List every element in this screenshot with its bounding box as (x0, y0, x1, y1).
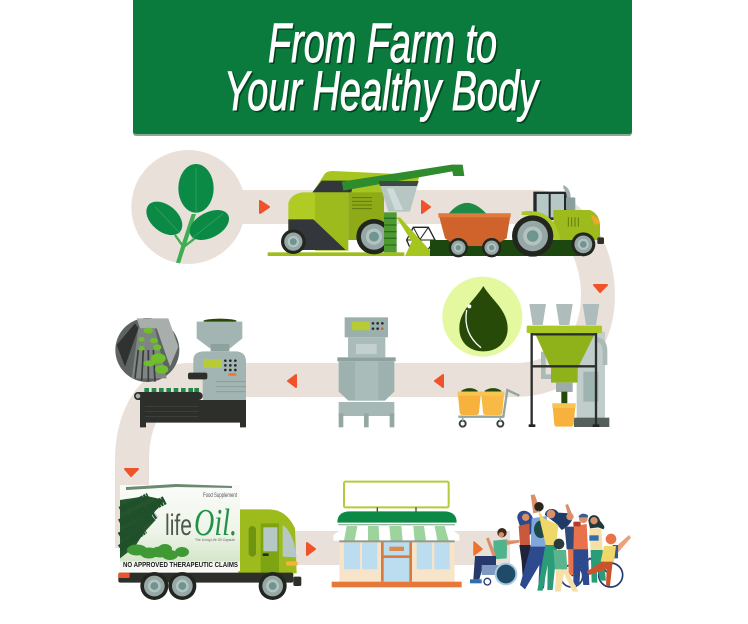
arrow 3 (594, 285, 607, 292)
shop storefront (332, 482, 462, 587)
woman in yellow top (534, 509, 573, 591)
oil drop icon (442, 277, 522, 357)
tagline: The Living Life Oil Capsule (195, 537, 236, 542)
child in green top (553, 539, 578, 592)
leaf circle icon (131, 150, 245, 264)
title shadow line 1: From Farm to (270, 12, 498, 76)
oil press hopper machine (527, 304, 609, 427)
no approved therapeutic claims notice: NO APPROVED THERAPEUTIC CLAIMS (123, 560, 238, 569)
woman in pale top (588, 515, 606, 583)
arrow 2 (422, 201, 430, 213)
woman with dark hair (565, 504, 576, 575)
man in wheelchair (470, 528, 519, 585)
arrow 4 (435, 375, 443, 387)
food supplement label: Food Supplement (203, 493, 237, 499)
fern leaves (120, 496, 165, 558)
buckets on cart (458, 389, 519, 427)
product box on truck (120, 484, 240, 571)
arrow 5 (288, 375, 296, 387)
arrow 7 (307, 543, 315, 555)
capsules (127, 544, 189, 560)
man in orange shirt (573, 514, 589, 585)
life wordmark: life (165, 509, 192, 542)
title line 1: From Farm to (268, 11, 497, 74)
arrow 8 (474, 542, 482, 555)
mixing tank machine (337, 317, 396, 427)
winding path band (132, 207, 598, 548)
title shadow line 2: Your Healthy Body (226, 60, 542, 124)
woman in orange top (517, 511, 534, 577)
arrow 1 (260, 201, 269, 213)
conveyor photo circle (115, 318, 179, 382)
combine harvester (268, 165, 464, 256)
delivery truck (118, 509, 301, 600)
child on bicycle (587, 534, 631, 586)
filling conveyor machine (134, 319, 246, 427)
bicycle wheels (561, 558, 623, 587)
man with raised arm (520, 494, 550, 589)
oil wordmark: Oil. (194, 502, 237, 544)
arrow 6 (125, 469, 138, 476)
tractor and trailer (430, 185, 604, 257)
title line 2: Your Healthy Body (224, 59, 540, 122)
title banner (133, 0, 632, 136)
happy crowd of people (470, 494, 631, 592)
